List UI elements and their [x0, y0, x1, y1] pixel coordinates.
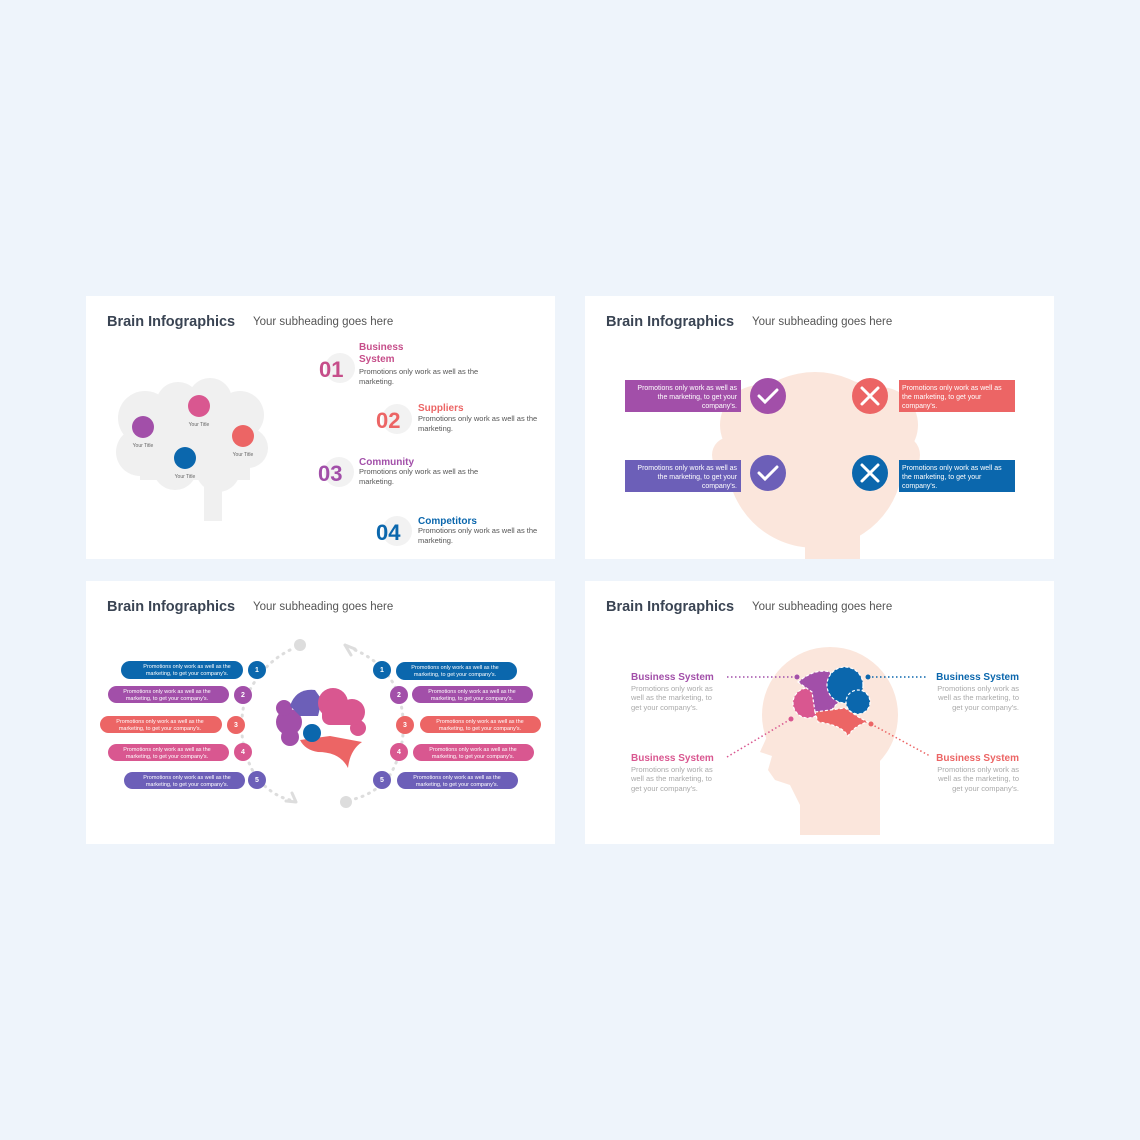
right pills: Promotions only work as well as the [413, 775, 501, 781]
label bottom-left: well as the marketing, to [630, 774, 712, 783]
item 02: Promotions only work as well as the [418, 414, 537, 423]
heading: Brain Infographics [107, 599, 235, 615]
item 03: marketing. [359, 477, 394, 486]
right pills: Promotions only work as well as the [428, 689, 516, 695]
heading: Brain Infographics [606, 314, 734, 330]
label bottom-left [630, 753, 714, 793]
brain points: Your Title [175, 474, 196, 480]
brain points [132, 395, 254, 480]
label bottom-right: get your company's. [952, 784, 1019, 793]
left pills: marketing, to get your company's. [126, 754, 209, 760]
text boxes: Promotions only work as well as [902, 465, 1002, 472]
item 04: Promotions only work as well as the [418, 526, 537, 535]
dotted connectors [727, 674, 930, 757]
brain points: Your Title [133, 443, 154, 449]
label top-right: well as the marketing, to [937, 693, 1019, 702]
label top-left: Business System [631, 672, 714, 683]
colored brain [793, 667, 870, 736]
right pills: 4 [397, 749, 401, 756]
panel: numbered pills [86, 581, 555, 844]
label top-left: Promotions only work as [631, 684, 713, 693]
heading [107, 314, 393, 330]
right pills: 5 [380, 777, 384, 784]
gray brain shape [116, 378, 268, 521]
text boxes: company's. [902, 483, 937, 490]
label top-left: well as the marketing, to [630, 693, 712, 702]
brain points: Your Title [233, 452, 254, 458]
item 03: Community [359, 457, 414, 468]
label bottom-right [936, 753, 1019, 793]
heading [606, 599, 892, 615]
label bottom-left: get your company's. [631, 784, 698, 793]
heading [107, 599, 393, 615]
label top-right: Promotions only work as [937, 684, 1019, 693]
text boxes: Promotions only work as well as [637, 385, 737, 392]
heading: Brain Infographics [107, 314, 235, 330]
right pills: marketing, to get your company's. [414, 672, 497, 678]
left pills: 4 [241, 749, 245, 756]
item 03: 03 [318, 461, 342, 486]
text boxes: company's. [902, 403, 937, 410]
left pills: 5 [255, 777, 259, 784]
panel: numbered list brain [86, 296, 555, 559]
item 02 [376, 403, 537, 434]
item 01: 01 [319, 357, 343, 382]
label bottom-left: Business System [631, 753, 714, 764]
item 01: Promotions only work as well as the [359, 367, 478, 376]
label bottom-left: Promotions only work as [631, 765, 713, 774]
peach head profile [760, 647, 898, 835]
heading: Your subheading goes here [752, 601, 892, 613]
right pills: Promotions only work as well as the [411, 665, 499, 671]
left pills [100, 661, 266, 789]
left pills: Promotions only work as well as the [143, 664, 231, 670]
left pills: Promotions only work as well as the [123, 689, 211, 695]
right pills: marketing, to get your company's. [439, 726, 522, 732]
text boxes: the marketing, to get your [902, 394, 982, 401]
left pills: Promotions only work as well as the [143, 775, 231, 781]
left pills: Promotions only work as well as the [123, 747, 211, 753]
right pills: 2 [397, 692, 401, 699]
label top-left: get your company's. [631, 703, 698, 712]
text boxes: company's. [702, 483, 737, 490]
label bottom-right: Business System [936, 753, 1019, 764]
item 03 [318, 457, 478, 487]
label top-right: get your company's. [952, 703, 1019, 712]
item 04: marketing. [418, 536, 453, 545]
right pills: marketing, to get your company's. [416, 782, 499, 788]
right pills [373, 661, 541, 789]
item 02: marketing. [418, 424, 453, 433]
right pills: marketing, to get your company's. [432, 754, 515, 760]
right pills: Promotions only work as well as the [429, 747, 517, 753]
text boxes: Promotions only work as well as [637, 465, 737, 472]
text boxes: the marketing, to get your [658, 394, 738, 401]
heading: Brain Infographics [606, 599, 734, 615]
right pills: marketing, to get your company's. [431, 696, 514, 702]
peach head [712, 372, 920, 559]
text boxes: company's. [702, 403, 737, 410]
left pills: 3 [234, 722, 238, 729]
item 01 [319, 342, 478, 386]
panel: do and don't [585, 296, 1054, 559]
item 02: 02 [376, 408, 400, 433]
item 01: System [359, 354, 395, 365]
item 03: Promotions only work as well as the [359, 467, 478, 476]
panel: head profile [585, 581, 1054, 844]
left pills: marketing, to get your company's. [146, 782, 229, 788]
left pills: 1 [255, 667, 259, 674]
left pills: 2 [241, 692, 245, 699]
label bottom-right: well as the marketing, to [937, 774, 1019, 783]
text boxes: the marketing, to get your [902, 474, 982, 481]
label bottom-right: Promotions only work as [937, 765, 1019, 774]
item 01: Business [359, 342, 404, 353]
item 04 [376, 516, 537, 546]
label top-left [630, 672, 714, 712]
left pills: marketing, to get your company's. [146, 671, 229, 677]
label top-right [936, 672, 1019, 712]
heading: Your subheading goes here [253, 601, 393, 613]
item 01: marketing. [359, 377, 394, 386]
icons: check and cross [750, 378, 888, 491]
item 02: Suppliers [418, 403, 464, 414]
dotted arcs [242, 639, 403, 808]
right pills: 1 [380, 667, 384, 674]
left pills: marketing, to get your company's. [119, 726, 202, 732]
left pills: Promotions only work as well as the [116, 719, 204, 725]
brain points: Your Title [189, 422, 210, 428]
item 04: 04 [376, 520, 401, 545]
heading [606, 314, 892, 330]
left pills: marketing, to get your company's. [126, 696, 209, 702]
heading: Your subheading goes here [752, 316, 892, 328]
right pills: Promotions only work as well as the [436, 719, 524, 725]
heading: Your subheading goes here [253, 316, 393, 328]
text boxes: Promotions only work as well as [902, 385, 1002, 392]
right pills: 3 [403, 722, 407, 729]
text boxes: the marketing, to get your [658, 474, 738, 481]
center brain [276, 688, 366, 768]
text boxes [625, 380, 1015, 492]
label top-right: Business System [936, 672, 1019, 683]
item 04: Competitors [418, 516, 477, 527]
